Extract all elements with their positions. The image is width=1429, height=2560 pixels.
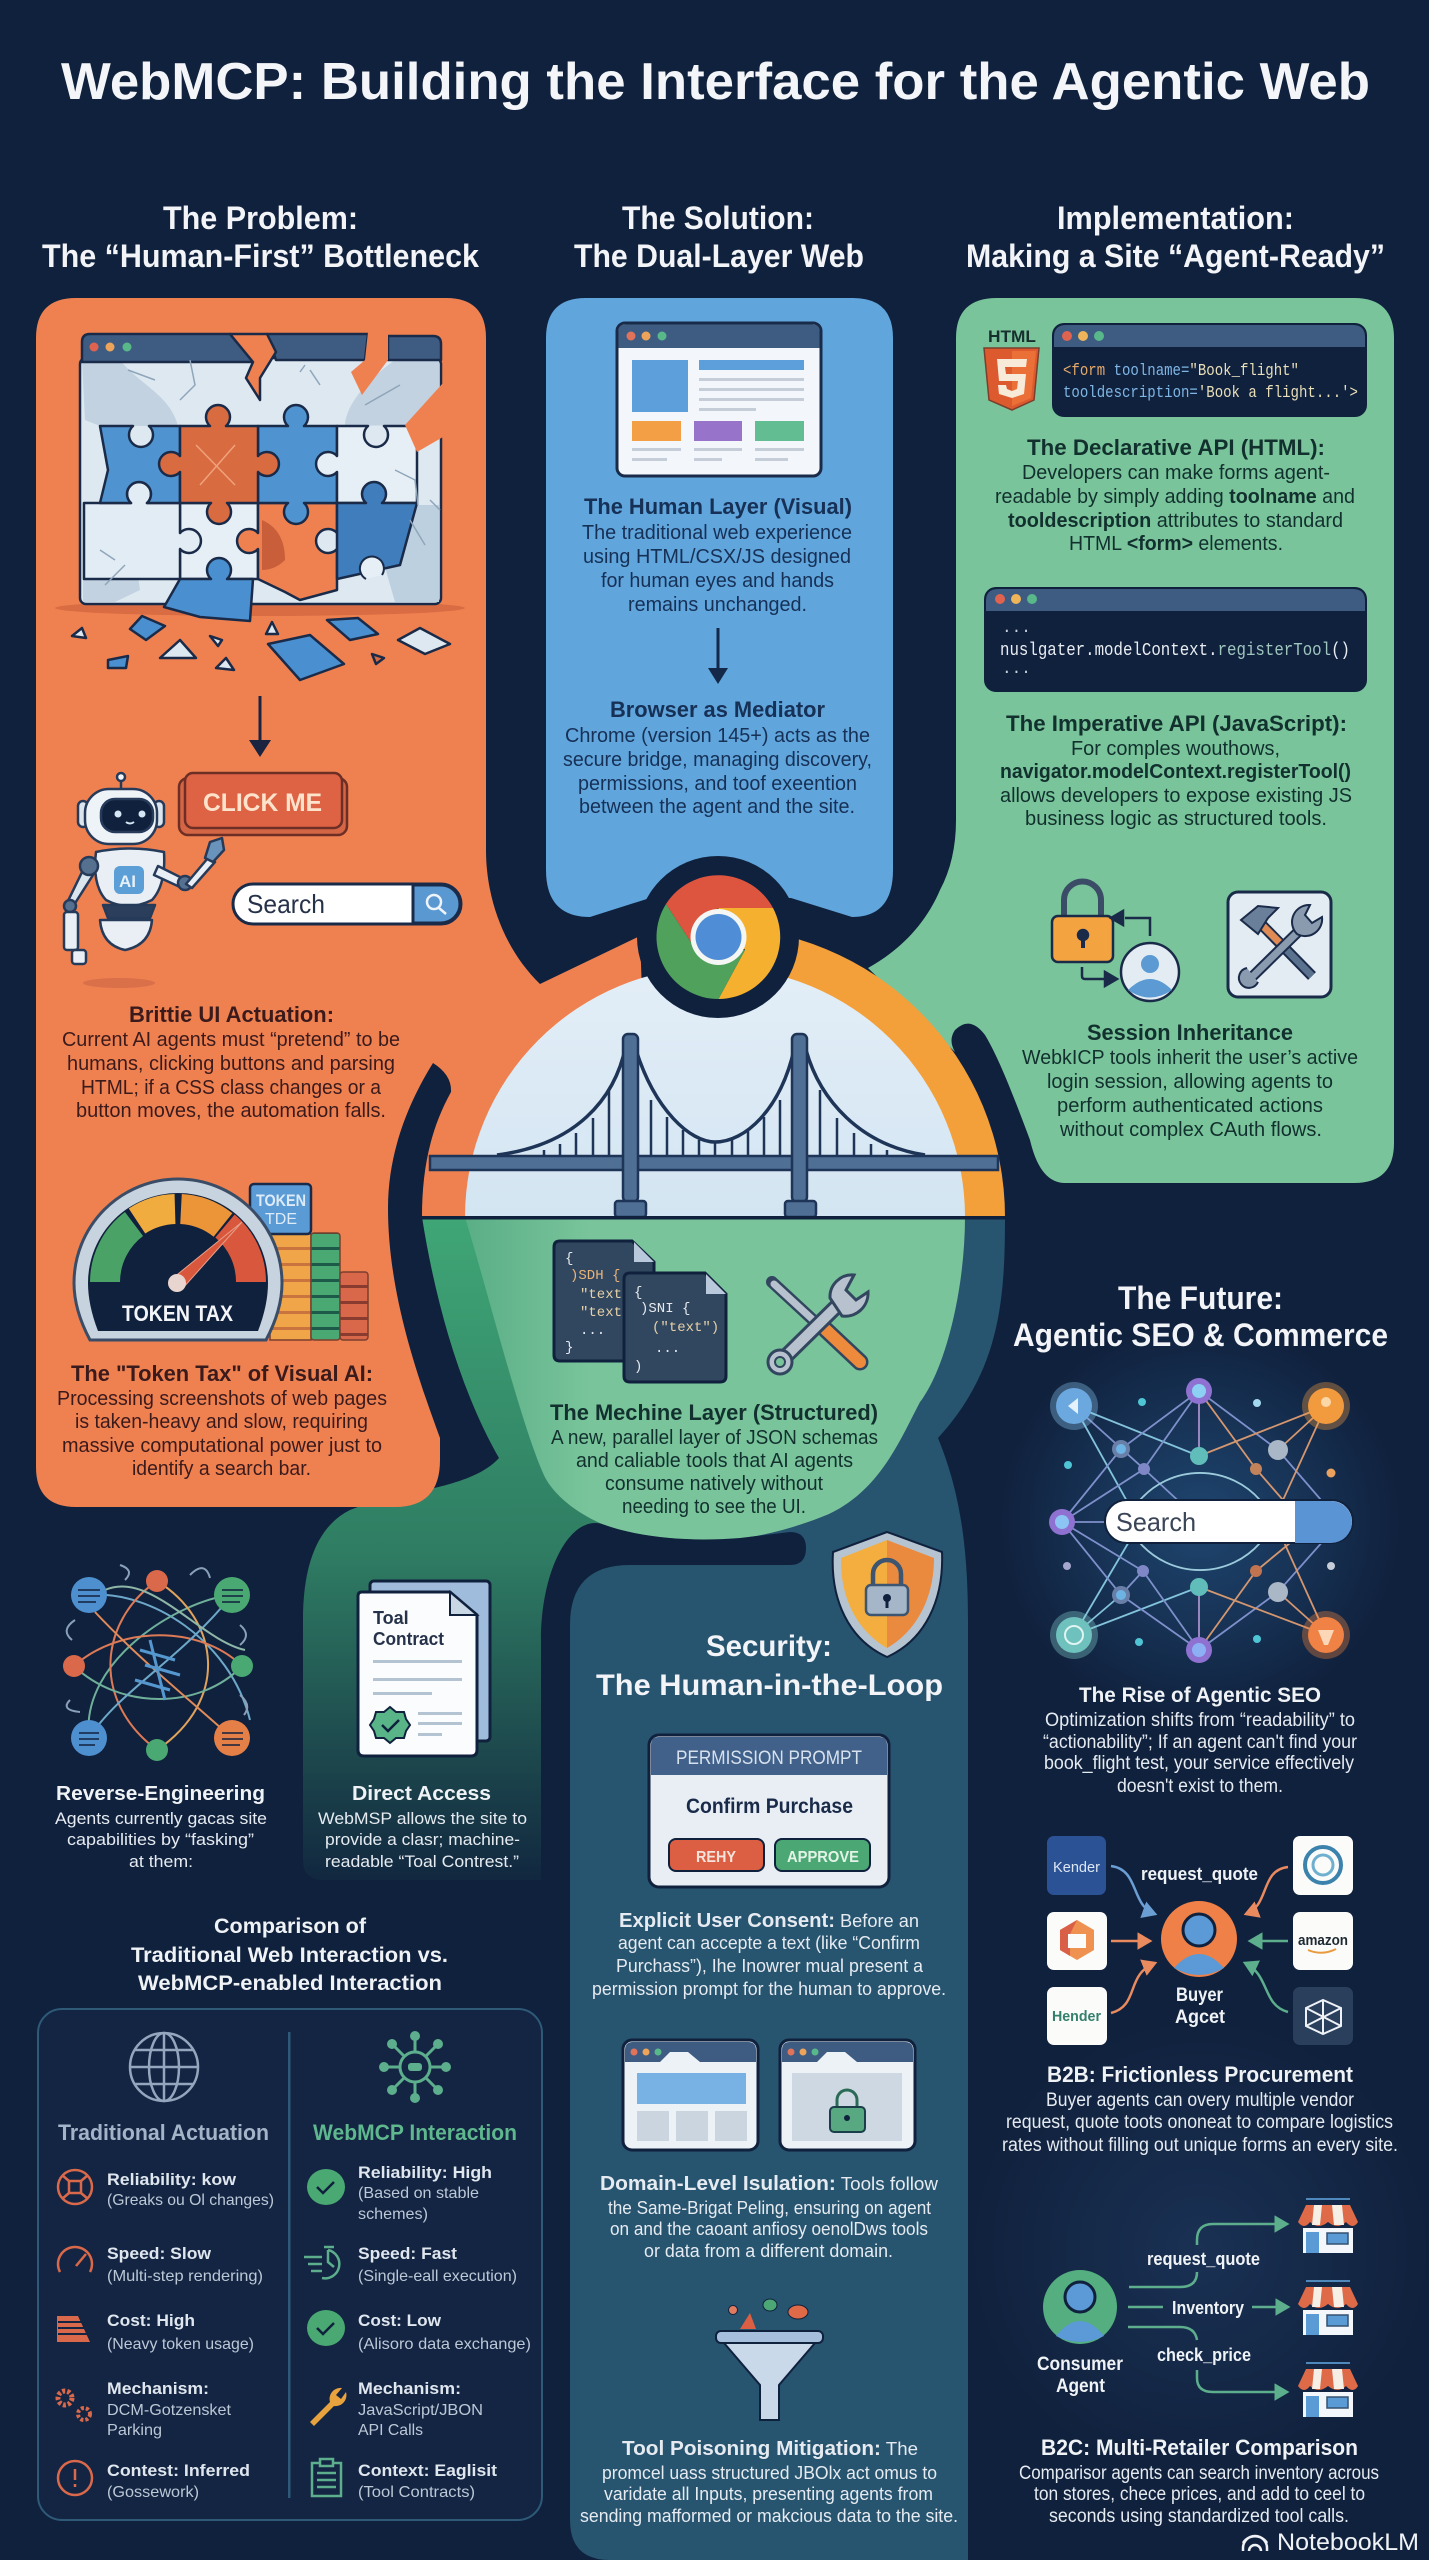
text: imperative api: allows developers to expose existing JS	[1000, 785, 1352, 807]
text: session inheritance: perform authenticated actions	[1057, 1095, 1323, 1117]
text: declarative api	[995, 435, 1355, 555]
diagram: b2c comparison: Consumer	[1037, 2354, 1124, 2375]
text: the rise of agentic seo	[1043, 1684, 1358, 1797]
text: the human layer	[582, 494, 852, 616]
icon: json documents	[554, 1241, 726, 1382]
sky half circle	[465, 967, 965, 1217]
icon: html5 shield: HTML	[988, 327, 1036, 346]
icon: html5 shield	[984, 327, 1039, 410]
text: declarative api: The Declarative API (HTML):	[1027, 435, 1325, 460]
text: token tax of visual ai: The "Token Tax" of Visual AI:	[71, 1361, 373, 1386]
icon: permission prompt	[649, 1735, 889, 1887]
diagram: b2b procurement: request_quote	[1141, 1864, 1258, 1884]
icon: token tax gauge: TOKEN TAX	[122, 1301, 233, 1326]
panel: machine layer lobe	[465, 1217, 965, 1540]
text: token tax of visual ai: is taken-heavy and slow, requiring	[75, 1411, 368, 1433]
heading: comparison: Comparison of	[214, 1915, 367, 1938]
text: domain-level isolation: Domain-Level Isulation: Tools follow	[600, 2173, 939, 2195]
text: browser as mediator: between the agent and the site.	[579, 796, 855, 818]
icon: json documents: ...	[655, 1341, 680, 1357]
column heading: webmcp: WebMCP Interaction	[313, 2120, 517, 2145]
icon: json documents: "text"	[580, 1305, 630, 1321]
icon: security shield	[833, 1532, 942, 1657]
icon: isolated browser windows	[623, 2040, 915, 2150]
code window: imperative api: nuslgater.modelContext.registerTool()	[1000, 641, 1350, 661]
panel: implementation background	[868, 298, 1394, 1183]
diagram: b2b procurement: Agcet	[1175, 2007, 1226, 2028]
icon: session lock and user	[1052, 882, 1179, 1001]
webmcp rows: API Calls	[358, 2422, 423, 2439]
icon: token tax gauge: TDE	[265, 1211, 297, 1228]
text: reverse-engineering: capabilities by “fasking”	[67, 1830, 254, 1849]
text: imperative api: business logic as structured tools.	[1025, 808, 1327, 830]
diagram: b2c comparison: Inventory	[1172, 2298, 1244, 2318]
text: browser as mediator: Browser as Mediator	[610, 697, 825, 722]
traditional rows: (Multi-step rendering)	[107, 2268, 263, 2285]
webmcp rows: schemes)	[358, 2206, 428, 2223]
icon: permission prompt: APPROVE	[787, 1849, 859, 1866]
text: the rise of agentic seo: book_flight test, your service effectively	[1044, 1753, 1354, 1774]
text: direct access: WebMSP allows the site to	[318, 1809, 527, 1828]
heading: security: Security:	[706, 1630, 832, 1663]
text: brittle ui actuation: button moves, the automation falls.	[76, 1100, 386, 1122]
traditional icons	[57, 2170, 92, 2495]
text: domain-level isolation: or data from a different domain.	[644, 2241, 893, 2261]
diagram: b2c comparison: Agent	[1056, 2376, 1106, 2397]
text: token tax of visual ai: Processing screenshots of web pages	[57, 1388, 387, 1410]
icon: json documents: }	[565, 1340, 573, 1356]
icon: hub	[379, 2031, 451, 2103]
text: explicit user consent	[592, 1910, 946, 1999]
title: WebMCP: Building the Interface for the Agentic Web	[61, 53, 1370, 111]
text: tool poisoning mitigation: varidate all Inputs, presenting agents from	[604, 2484, 933, 2504]
text: b2b frictionless procurement	[1002, 2062, 1398, 2156]
text: declarative api: Developers can make forms agent-	[1022, 462, 1330, 484]
text: imperative api: For comples wouthows,	[1071, 738, 1280, 760]
text: explicit user consent: Explicit User Consent: Before an	[619, 1910, 919, 1932]
text: b2c multi-retailer comparison: ton stores, chece prices, and add to ceel to	[1034, 2484, 1365, 2505]
section headings row: The Solution:	[622, 200, 814, 236]
traditional rows: Parking	[107, 2422, 162, 2439]
webmcp icons	[304, 2169, 346, 2496]
traditional rows: (Gossework)	[107, 2484, 199, 2501]
icon: store	[1298, 2199, 1358, 2253]
icon: tool contract document: Contract	[373, 1629, 444, 1649]
icon: permission prompt: PERMISSION PROMPT	[676, 1748, 862, 1769]
traditional rows: Mechanism:	[107, 2379, 209, 2398]
text: imperative api: The Imperative API (JavaScript):	[1006, 711, 1347, 736]
section headings row: Making a Site “Agent-Ready”	[966, 238, 1385, 274]
text: tool poisoning mitigation	[580, 2438, 958, 2526]
webmcp rows: Context: Eaglisit	[358, 2461, 497, 2480]
text: explicit user consent: Purchass”), Ihe Inowrer mual present a	[616, 1956, 924, 1976]
traditional rows: Speed: Slow	[107, 2244, 212, 2263]
text: tool poisoning mitigation: promcel uass structured JBOlx act omus to	[602, 2463, 937, 2483]
diagram: b2c comparison: check_price	[1157, 2345, 1251, 2365]
traditional rows: Cost: High	[107, 2311, 195, 2330]
icon: suspension bridge	[420, 1034, 1006, 1220]
code window: imperative api: ...	[1002, 660, 1031, 678]
code window: imperative api	[984, 587, 1367, 692]
icon: chrome browser logo	[637, 856, 799, 1018]
text: declarative api: readable by simply adding toolname and	[995, 486, 1355, 508]
text: browser as mediator: secure bridge, managing discovery,	[563, 749, 872, 771]
icon: click me button	[179, 773, 347, 835]
text: direct access	[318, 1783, 527, 1871]
panel: the solution background	[546, 298, 893, 917]
heading: security	[596, 1630, 943, 1702]
text: the machine layer: A new, parallel layer of JSON schemas	[551, 1427, 878, 1449]
diagram: b2b procurement	[1047, 1836, 1353, 2045]
text: session inheritance: Session Inheritance	[1087, 1020, 1293, 1045]
section headings row: The “Human-First” Bottleneck	[42, 238, 479, 274]
icon: broken browser puzzle	[55, 332, 465, 680]
icon: tool contract document: Toal	[373, 1608, 409, 1628]
webmcp rows	[358, 2163, 531, 2501]
webmcp rows: Cost: Low	[358, 2311, 442, 2330]
text: reverse-engineering	[55, 1783, 267, 1871]
heading: comparison: WebMCP-enabled Interaction	[138, 1972, 442, 1995]
icon: human layer browser	[617, 323, 821, 476]
text: brittle ui actuation: Current AI agents must “pretend” to be	[62, 1029, 400, 1051]
icon: robot	[64, 773, 224, 988]
heading: the future	[1013, 1280, 1388, 1353]
bridge ring and sky	[715, 927, 1005, 1217]
text: b2b frictionless procurement: rates without filling out unique forms an every site.	[1002, 2135, 1398, 2156]
text: brittle ui actuation	[62, 1002, 400, 1122]
traditional rows: (Greaks ou Ol changes)	[107, 2192, 274, 2209]
icon: json documents: )	[634, 1359, 642, 1375]
text: brittle ui actuation: Brittie UI Actuation:	[129, 1002, 334, 1027]
text: direct access: provide a clasr; machine-	[325, 1830, 520, 1849]
panel: comparison table	[38, 2009, 542, 2520]
heading: comparison: Traditional Web Interaction vs.	[131, 1944, 448, 1967]
icon: globe	[130, 2033, 198, 2101]
section headings row: The Dual-Layer Web	[574, 238, 864, 274]
icon: tools tile	[1228, 892, 1331, 997]
webmcp rows: Mechanism:	[358, 2379, 461, 2398]
text: the human layer: for human eyes and hands	[601, 570, 834, 592]
text: brittle ui actuation: HTML; if a CSS class changes or a	[81, 1077, 382, 1099]
text: browser as mediator: Chrome (version 145+) acts as the	[565, 725, 870, 747]
column heading: traditional: Traditional Actuation	[58, 2120, 269, 2145]
arrow	[249, 696, 271, 757]
icon: json documents: {	[634, 1285, 642, 1301]
webmcp rows: (Tool Contracts)	[358, 2484, 475, 2501]
webmcp rows: Speed: Fast	[358, 2244, 457, 2263]
webmcp rows: (Alisoro data exchange)	[358, 2336, 531, 2353]
icon: click me button: CLICK ME	[203, 789, 322, 817]
webmcp rows: Reliability: High	[358, 2163, 492, 2182]
section headings row: The Problem:	[163, 200, 358, 236]
text: imperative api: navigator.modelContext.registerTool()	[1000, 761, 1351, 783]
icon: json documents: ("text")	[652, 1320, 719, 1336]
traditional rows: Contest: Inferred	[107, 2461, 250, 2480]
icon: token tax gauge	[74, 1179, 368, 1340]
code window: declarative api: <form toolname="Book_flight"	[1063, 362, 1299, 381]
text: the machine layer: and caliable tools that AI agents	[576, 1450, 853, 1472]
panel: security	[570, 1217, 1005, 2560]
text: b2c multi-retailer comparison: seconds using standardized tool calls.	[1049, 2506, 1349, 2527]
diagram: b2b procurement: Kender	[1053, 1859, 1100, 1876]
panel: the problem background	[36, 298, 650, 1507]
lower-left green band: direct access panel	[303, 1217, 715, 1880]
text: the machine layer: The Mechine Layer (Structured)	[550, 1400, 878, 1425]
traditional rows	[107, 2170, 274, 2501]
text: tool poisoning mitigation: sending mafformed or makcious data to the site.	[580, 2506, 958, 2526]
text: session inheritance: login session, allowing agents to	[1047, 1071, 1333, 1093]
traditional rows: (Neavy token usage)	[107, 2336, 254, 2353]
text: domain-level isolation: the Same-Brigat Peling, ensuring on agent	[608, 2198, 931, 2218]
diagram: b2b procurement: Buyer	[1176, 1985, 1224, 2006]
diagram: b2c comparison	[1037, 2199, 1358, 2417]
section headings row	[42, 200, 1385, 274]
icon: tool contract document	[358, 1581, 490, 1756]
diagram: b2b procurement: Hender	[1052, 2008, 1101, 2025]
text: b2c multi-retailer comparison: Comparisor agents can search inventory acrous	[1019, 2463, 1379, 2484]
code window: imperative api: ...	[1002, 619, 1031, 637]
text: brittle ui actuation: humans, clicking buttons and parsing	[67, 1053, 395, 1075]
icon: json documents: "text"	[580, 1287, 630, 1303]
text: session inheritance: without complex CAuth flows.	[1059, 1119, 1322, 1141]
text: the rise of agentic seo: The Rise of Agentic SEO	[1079, 1684, 1321, 1707]
icon: json documents: {	[565, 1251, 573, 1267]
notebooklm logo: NotebookLM	[1277, 2529, 1419, 2556]
icon: json documents: )SNI {	[640, 1301, 690, 1317]
diagram: b2c comparison: request_quote	[1147, 2249, 1260, 2269]
text: the machine layer: needing to see the UI.	[622, 1496, 806, 1518]
text: b2b frictionless procurement: B2B: Frictionless Procurement	[1047, 2062, 1354, 2087]
text: reverse-engineering: Agents currently gacas site	[55, 1809, 267, 1828]
text: the machine layer: consume natively without	[605, 1473, 823, 1495]
text: token tax of visual ai: identify a search bar.	[132, 1458, 311, 1480]
section headings row: Implementation:	[1057, 200, 1294, 236]
text: browser as mediator	[563, 697, 872, 818]
text: token tax of visual ai: massive computational power just to	[62, 1435, 382, 1457]
text: the rise of agentic seo: Optimization shifts from “readability” to	[1045, 1710, 1355, 1731]
code window: declarative api	[1052, 323, 1367, 417]
text: session inheritance	[1022, 1020, 1358, 1141]
traditional rows: DCM-Gotzensket	[107, 2402, 232, 2419]
text: declarative api: tooldescription attributes to standard	[1008, 510, 1343, 532]
text: direct access: Direct Access	[352, 1783, 491, 1805]
webmcp rows: (Single-eall execution)	[358, 2268, 517, 2285]
heading: security: The Human-in-the-Loop	[596, 1669, 943, 1702]
icon: json documents: ...	[580, 1323, 605, 1339]
text: direct access: readable “Toal Contrest.”	[325, 1852, 519, 1871]
icon: agent network with search: Search	[1116, 1507, 1196, 1537]
icon: wrench and screwdriver	[768, 1275, 868, 1374]
webmcp rows: JavaScript/JBON	[358, 2402, 483, 2419]
icon: search bar: Search	[247, 889, 325, 919]
text: domain-level isolation: on and the caoant anfiosy oenolDws tools	[610, 2219, 928, 2239]
text: the rise of agentic seo: doesn't exist to them.	[1117, 1776, 1283, 1797]
text: the human layer: The Human Layer (Visual)	[584, 494, 852, 519]
text: b2c multi-retailer comparison	[1019, 2435, 1379, 2527]
icon: json documents: )SDH {	[570, 1268, 620, 1284]
text: the human layer: using HTML/CSX/JS designed	[583, 546, 851, 568]
traditional rows: Reliability: kow	[107, 2170, 237, 2189]
text: b2b frictionless procurement: request, quote toots ononeat to compare logistics	[1006, 2112, 1393, 2133]
icon: robot: AI	[119, 872, 136, 891]
heading: the future: Agentic SEO & Commerce	[1013, 1317, 1388, 1353]
text: the machine layer	[550, 1400, 878, 1518]
text: token tax of visual ai	[57, 1361, 387, 1480]
icon: store	[1298, 2363, 1358, 2417]
text: the human layer: The traditional web experience	[582, 522, 852, 544]
text: declarative api: HTML <form> elements.	[1069, 533, 1283, 555]
text: tool poisoning mitigation: Tool Poisoning Mitigation: The	[622, 2438, 918, 2460]
text: session inheritance: WebkICP tools inherit the user’s active	[1022, 1047, 1358, 1069]
icon: reverse engineering tangle	[63, 1565, 253, 1761]
text: reverse-engineering: Reverse-Engineering	[56, 1783, 265, 1805]
icon: permission prompt: Confirm Purchase	[686, 1795, 853, 1818]
heading: comparison	[131, 1915, 448, 1995]
diagram: b2b procurement: amazon	[1298, 1932, 1348, 1949]
icon: search bar	[233, 884, 461, 924]
webmcp rows: (Based on stable	[358, 2185, 479, 2202]
text: domain-level isolation	[600, 2173, 939, 2261]
code window: declarative api: tooldescription='Book a flight...'>	[1063, 384, 1358, 403]
icon: token tax gauge: TOKEN	[256, 1191, 306, 1210]
icon: permission prompt: REHY	[696, 1849, 736, 1866]
text: browser as mediator: permissions, and toof exeention	[578, 773, 857, 795]
icon: filter funnel	[716, 2299, 823, 2420]
heading: the future: The Future:	[1118, 1280, 1283, 1316]
text: b2b frictionless procurement: Buyer agents can overy multiple vendor	[1046, 2090, 1355, 2111]
text: the rise of agentic seo: “actionability”; If an agent can't find your	[1043, 1732, 1358, 1753]
text: reverse-engineering: at them:	[129, 1852, 193, 1871]
text: b2c multi-retailer comparison: B2C: Multi-Retailer Comparison	[1041, 2435, 1358, 2460]
arrow	[708, 628, 728, 684]
text: the human layer: remains unchanged.	[628, 594, 807, 616]
icon: store	[1298, 2281, 1358, 2335]
icon: agent network with search	[1049, 1378, 1353, 1663]
text: explicit user consent: agent can accepte a text (like “Confirm	[618, 1933, 920, 1953]
text: explicit user consent: permission prompt for the human to approve.	[592, 1979, 946, 1999]
text: imperative api	[1000, 711, 1352, 830]
